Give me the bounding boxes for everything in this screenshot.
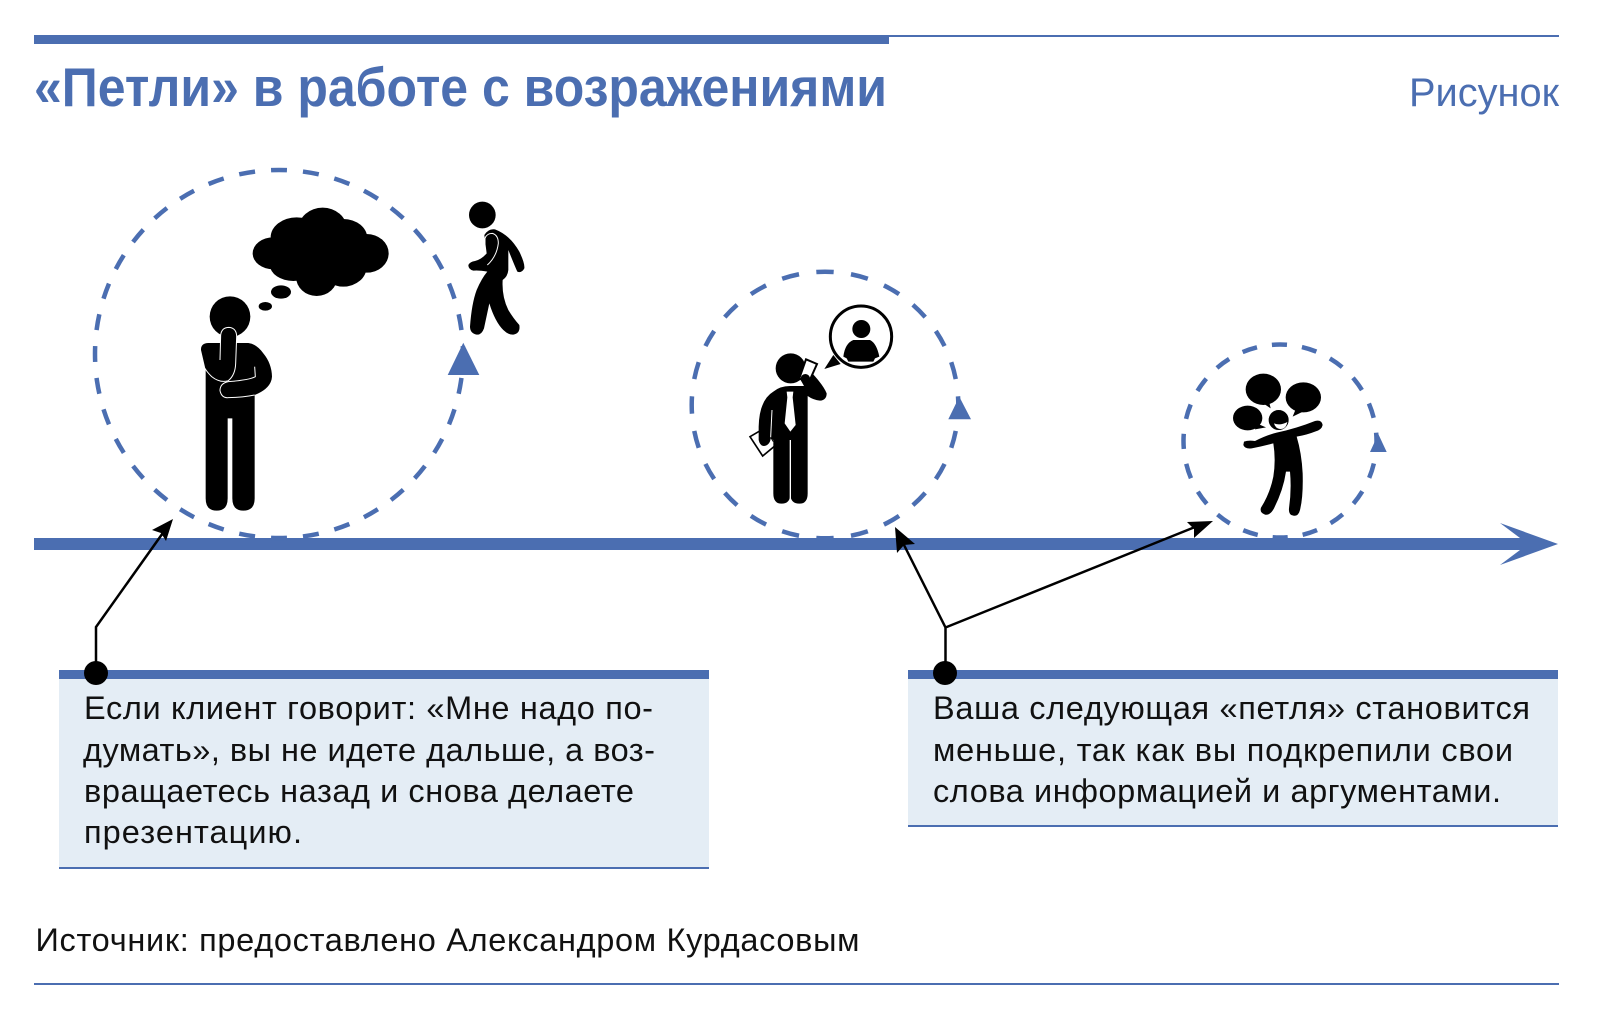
loop 3: small dashed circle with talking man: [1184, 344, 1387, 538]
thinking man: [201, 296, 272, 511]
speech bubbles: [1233, 374, 1321, 430]
panel 2 text: меньше, так как вы подкрепили свои: [933, 732, 1513, 768]
loop 2: medium dashed circle with man on phone: [692, 272, 971, 538]
dashed circle 1: [95, 170, 463, 538]
header rule: [34, 35, 1559, 44]
speech bubble with person: [824, 306, 892, 369]
phone: [799, 359, 817, 383]
direction triangle 2: [948, 397, 971, 419]
panel 1 text: Если клиент говорит: «Мне надо по-: [84, 690, 653, 726]
thought cloud: [253, 208, 389, 311]
bottom rule: [34, 983, 1559, 985]
panel 1 text: думать», вы не идете дальше, а воз-: [83, 732, 655, 768]
arrow: left pointer to first loop: [84, 519, 173, 685]
arrow: right pointer to second and third loops: [895, 521, 1213, 685]
dashed circle 3: [1184, 344, 1376, 538]
title: «Петли» в работе с возражениями: [34, 56, 887, 118]
icon: thinking man with cloud: [201, 202, 524, 511]
panel 1 text: [83, 690, 655, 850]
source note: Источник: предоставлено Александром Курдасовым: [36, 922, 860, 958]
figure label: Рисунок: [1409, 71, 1559, 115]
loop 1: large dashed circle with objecting client: [95, 170, 524, 538]
timeline arrow: [34, 523, 1558, 565]
panel 2 text: Ваша следующая «петля» становится: [933, 690, 1530, 726]
head: [776, 353, 806, 383]
panel 2 text: [933, 690, 1530, 809]
icon: man with speech bubbles: [1233, 374, 1323, 516]
document: [750, 423, 784, 456]
panel 1 top and bottom rules: [59, 670, 709, 869]
panel: left explanation: [59, 670, 709, 869]
panel 1 background: [59, 670, 709, 869]
panel 2 top and bottom rules: [908, 670, 1558, 827]
panel 2 background: [908, 670, 1558, 827]
direction triangle 3: [1370, 434, 1387, 452]
businessman body: [759, 372, 827, 504]
walking man leaving: [468, 202, 524, 335]
panel 1 text: презентацию.: [84, 814, 302, 850]
direction triangle 1: [448, 343, 479, 375]
icon: man on the phone: [750, 306, 892, 504]
panel 2 text: слова информацией и аргументами.: [933, 773, 1501, 809]
talking man: [1243, 410, 1323, 516]
panel: right explanation: [908, 670, 1558, 827]
panel 1 text: вращаетесь назад и снова делаете: [84, 773, 634, 809]
dashed circle 2: [692, 272, 958, 538]
